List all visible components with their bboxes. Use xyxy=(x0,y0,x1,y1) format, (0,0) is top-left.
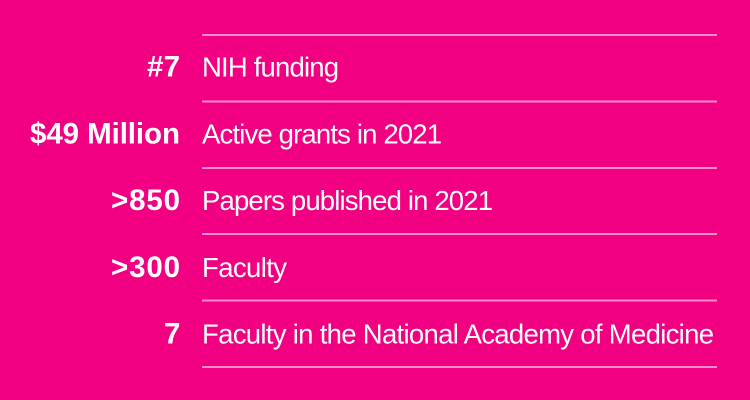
row: faculty: Faculty xyxy=(202,252,287,283)
row: faculty xyxy=(111,251,287,284)
row: active grants: $49 Million xyxy=(30,118,180,150)
row: National Academy of Medicine faculty: 7 xyxy=(164,318,180,350)
row: active grants: Active grants in 2021 xyxy=(202,118,442,150)
row: active grants xyxy=(30,118,442,150)
row: National Academy of Medicine faculty: Faculty in the National Academy of Medicine xyxy=(202,318,714,350)
row: NIH funding: #7 xyxy=(147,50,180,84)
row: faculty: >300 xyxy=(111,251,180,284)
row: papers published: Papers published in 2021 xyxy=(202,185,493,216)
row: NIH funding: NIH funding xyxy=(202,52,339,82)
row: NIH funding xyxy=(147,50,339,84)
row: papers published: >850 xyxy=(111,184,180,217)
